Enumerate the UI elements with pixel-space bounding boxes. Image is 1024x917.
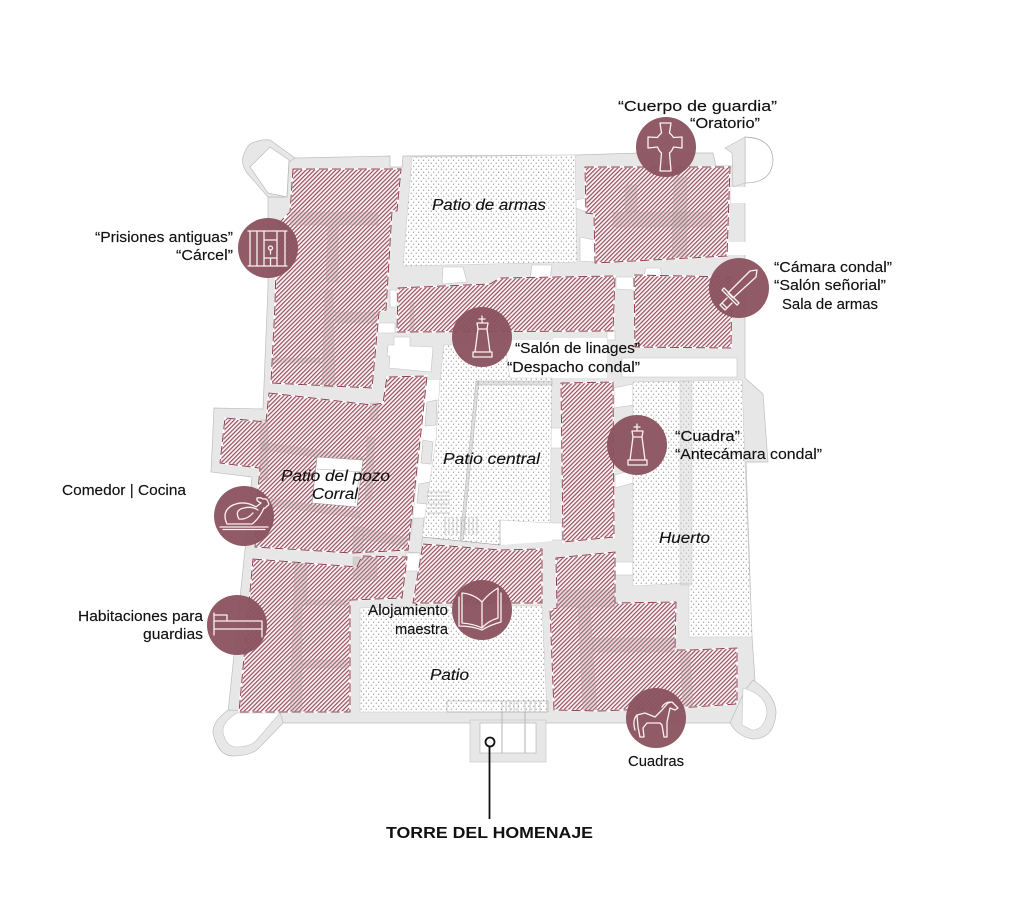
label: Antecámara condal: “Antecámara condal” bbox=[675, 446, 822, 463]
label: Cuadra: “Cuadra” bbox=[675, 428, 740, 445]
label: Salón de linages: “Salón de linages” bbox=[515, 340, 640, 357]
label: maestra: maestra bbox=[395, 621, 449, 638]
label: Cuadras: Cuadras bbox=[628, 753, 684, 770]
icon badge: open book bbox=[452, 580, 512, 640]
label: Cuerpo de guardia: “Cuerpo de guardia” bbox=[618, 98, 777, 115]
well courtyard opening bbox=[312, 457, 363, 507]
icon badge: roast chicken bbox=[214, 486, 274, 546]
heading: Torre del homenaje: TORRE DEL HOMENAJE bbox=[386, 825, 593, 842]
room: cuerpo de guardia bbox=[585, 167, 730, 263]
label: Salón señorial: “Salón señorial” bbox=[774, 277, 886, 294]
label: Comedor Cocina: Comedor | Cocina bbox=[62, 482, 187, 499]
room: alojamiento maestra bbox=[413, 544, 542, 603]
room: habitaciones para guardias bbox=[239, 556, 407, 712]
courtyard: Patio de armas bbox=[403, 155, 577, 266]
room: cuadra bbox=[561, 382, 614, 542]
label: guardias: guardias bbox=[143, 626, 203, 643]
west wall piers of central patio bbox=[408, 400, 437, 553]
wall openings bbox=[378, 187, 746, 575]
label: Patio central: Patio central bbox=[443, 451, 541, 468]
label: Oratorio: “Oratorio” bbox=[690, 115, 760, 132]
courtyard: Patio bbox=[360, 606, 547, 712]
icon badge: sword bbox=[709, 258, 769, 318]
room: cuadras bbox=[550, 552, 737, 711]
tower: south-east bbox=[730, 680, 776, 739]
room: prisiones bbox=[271, 169, 401, 388]
icon badge: chess king second bbox=[607, 415, 667, 475]
keep pointer bbox=[486, 738, 494, 819]
courtyards with dotted ground bbox=[360, 155, 752, 712]
annotation labels bbox=[62, 98, 892, 770]
tower: south-west bbox=[213, 710, 283, 756]
label: Corral: Corral bbox=[312, 486, 359, 503]
icon badge: horse bbox=[626, 688, 686, 748]
huerto path strip bbox=[680, 381, 692, 585]
label: Alojamiento: Alojamiento bbox=[368, 602, 448, 619]
icon badge: celtic cross bbox=[636, 117, 696, 177]
icon badge: prison bars bbox=[238, 218, 298, 278]
label: Prisiones antiguas: “Prisiones antiguas” bbox=[95, 229, 233, 246]
label: Cárcel: “Cárcel” bbox=[176, 247, 233, 264]
central patio structure lines bbox=[422, 381, 552, 712]
label: Sala de armas: Sala de armas bbox=[782, 296, 878, 313]
icon badge: chess king bbox=[452, 307, 512, 367]
label: Huerto: Huerto bbox=[659, 530, 710, 547]
tower: north-west bbox=[242, 140, 295, 197]
courtyard: Patio central bbox=[422, 345, 552, 545]
label: Patio del pozo: Patio del pozo bbox=[281, 468, 390, 485]
label: Patio: Patio bbox=[430, 667, 469, 684]
room: salón de linages bbox=[397, 276, 615, 332]
label: Cámara condal: “Cámara condal” bbox=[774, 259, 892, 276]
outer walls bbox=[211, 153, 768, 723]
icon badge: bed bbox=[207, 595, 267, 655]
label: Habitaciones para: Habitaciones para bbox=[78, 608, 204, 625]
hatched rooms bbox=[220, 167, 737, 712]
room: cámara condal bbox=[634, 275, 732, 348]
label: Patio de armas: Patio de armas bbox=[432, 197, 546, 214]
tower: north-east bbox=[725, 137, 773, 187]
tower: keep footprint bbox=[470, 712, 546, 762]
room: patio del pozo bbox=[220, 376, 427, 553]
label: Despacho condal: “Despacho condal” bbox=[507, 359, 640, 376]
castle wall plan bbox=[211, 137, 776, 762]
courtyard: Huerto bbox=[633, 380, 752, 637]
italic place names bbox=[281, 197, 710, 684]
